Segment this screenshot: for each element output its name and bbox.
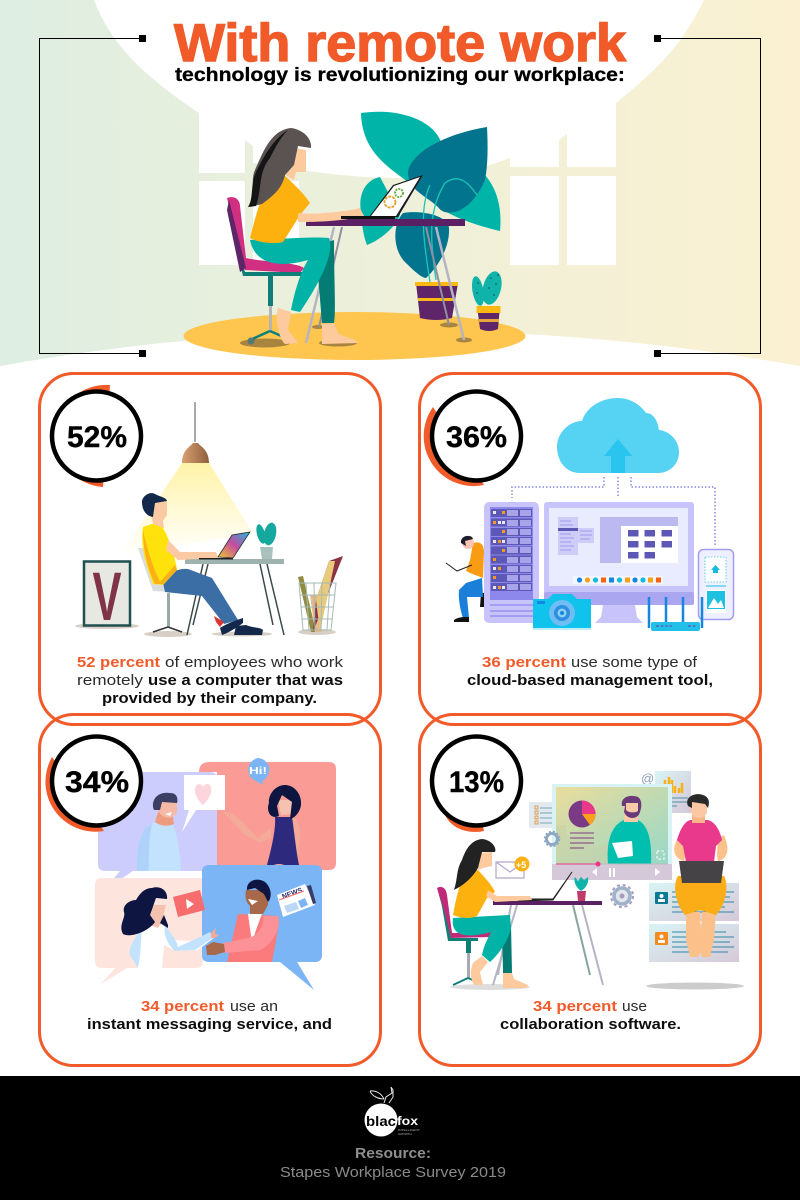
profile cards (649, 883, 739, 962)
badge 52% (52, 385, 141, 487)
caption: 36 percent: cloud-based management tool, (467, 673, 713, 689)
panel: 36 percent (420, 374, 760, 724)
bracket frame right (654, 35, 760, 357)
newspaper: NEWS (281, 887, 304, 901)
woman (318, 240, 335, 323)
bubble: lavender (98, 772, 217, 891)
caption: 13 percent panel (500, 999, 681, 1033)
caption: 52 percent: use a computer that was (148, 673, 343, 689)
chair (227, 197, 304, 273)
bracket frame left (40, 35, 146, 357)
caption: 34 percent (87, 999, 332, 1033)
badge 36%: 36% (446, 421, 507, 454)
person: man sitting with laptop (674, 794, 727, 957)
chart card (655, 771, 691, 813)
source text: Stapes Workplace Survey 2019 (280, 1164, 506, 1181)
monitor (595, 605, 643, 623)
hero illustration: woman working at desk with plants (184, 112, 526, 360)
person: woman in dress (222, 785, 301, 868)
illustration: man at laptop under lamp (75, 402, 343, 637)
envelope with +5 badge: +5 (516, 860, 526, 870)
person with tablet (480, 593, 484, 607)
newspaper (277, 884, 316, 917)
panel: 13 percent (420, 714, 760, 1066)
badge 36% (424, 392, 521, 486)
logo: blacfox: INTELLIGENT (398, 1128, 420, 1132)
router (649, 597, 702, 628)
desk (306, 227, 334, 343)
badge 34%: 34% (65, 766, 129, 799)
pot and cactus (416, 283, 458, 320)
caption: 36 percent: 36 percent (482, 655, 566, 671)
caption: 52 percent: remotely (77, 673, 144, 689)
person: woman at laptop (437, 839, 532, 988)
caption: 13 percent panel: use (622, 999, 647, 1015)
panel: 52 percent (40, 374, 380, 724)
badge 34% (45, 736, 141, 832)
caption: 34 percent: use an (230, 999, 278, 1015)
framed letter: V (92, 558, 122, 635)
person: man in sweater (137, 793, 181, 871)
badge 13% (432, 736, 521, 832)
gears (544, 832, 633, 907)
phone (698, 550, 734, 620)
caption: 52 percent (77, 655, 344, 707)
badge 52%: 52% (67, 421, 127, 454)
checklist card (529, 802, 554, 828)
framed letter (84, 558, 130, 635)
speech box with heart (182, 775, 225, 832)
caption: 13 percent panel: 34 percent (533, 999, 617, 1015)
logo: blacfox: GROWTH (398, 1132, 412, 1136)
illustration: video collaboration (437, 771, 744, 990)
title: With remote work (174, 14, 627, 73)
caption: 34 percent: instant messaging service, and (87, 1017, 332, 1033)
caption: 13 percent panel: collaboration software. (500, 1017, 681, 1033)
laptop (369, 175, 423, 217)
cloud (557, 398, 679, 473)
person: woman with long hair (121, 887, 219, 968)
source heading: Resource: (355, 1145, 431, 1162)
logo: blacfox (364, 1087, 420, 1136)
caption: 36 percent: use some type of (571, 655, 698, 671)
caption: 52 percent: provided by their company. (102, 691, 317, 707)
at sign: @ (641, 771, 654, 786)
bubble: blue (202, 865, 322, 990)
subtitle: technology is revolutionizing our workplace: (175, 64, 625, 86)
video player (552, 784, 672, 880)
illustration: cloud upload with devices (446, 398, 734, 631)
bubble: peach (95, 878, 203, 984)
logo: blacfox: fox (397, 1114, 418, 1128)
footer (0, 1076, 800, 1200)
caption: 36 percent (467, 655, 713, 689)
bubble: Hi! (248, 758, 269, 785)
server (484, 502, 539, 623)
panel: 34 percent (40, 714, 380, 1066)
desk and plant (493, 872, 603, 985)
person: man in red jacket (206, 880, 279, 962)
illustration: instant messaging bubbles (95, 758, 336, 990)
logo: blacfox: blac (366, 1113, 396, 1129)
caption: 34 percent: 34 percent (141, 999, 224, 1015)
caption: 52 percent: of employees who work (165, 655, 344, 671)
envelope with +5 badge (496, 856, 530, 878)
camera (533, 594, 591, 628)
caption: 52 percent: 52 percent (77, 655, 160, 671)
pencil basket (298, 556, 343, 632)
bubble: Hi!: Hi! (249, 766, 267, 777)
video card (173, 890, 205, 917)
header background room (0, 0, 800, 372)
bubble: salmon (199, 762, 336, 870)
badge 13%: 13% (449, 766, 504, 799)
